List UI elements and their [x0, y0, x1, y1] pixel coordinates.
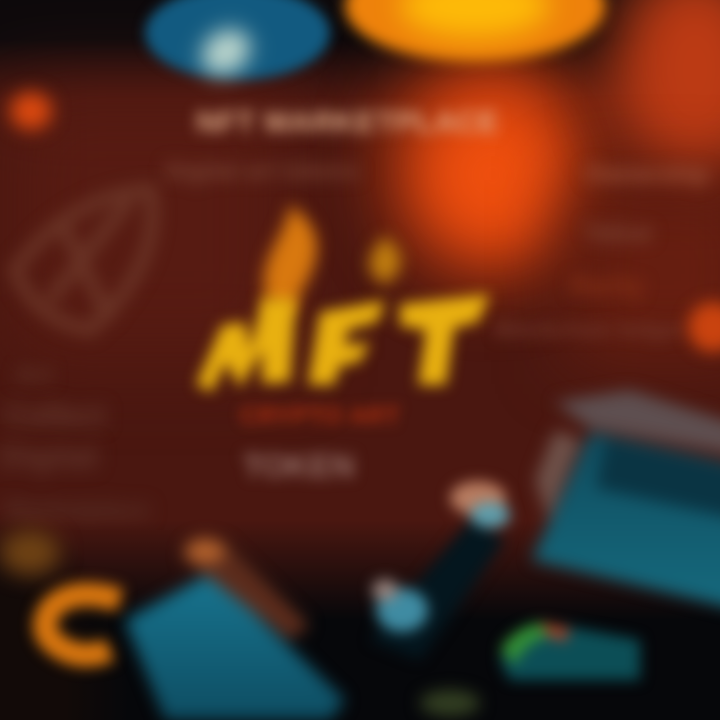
subheading: Digital art tokens: [165, 158, 360, 185]
flame icons: [252, 199, 410, 318]
left labels: Art: [15, 359, 53, 389]
small orange mark: [0, 530, 60, 575]
rainbow chart at bottom: [492, 614, 648, 688]
right teal card: [526, 383, 720, 616]
NFT title: [188, 286, 496, 400]
orange dot right: [688, 302, 720, 352]
left labels: Marketplace: [5, 496, 150, 524]
left teal card: [118, 528, 351, 720]
right label two: Value: [585, 217, 653, 247]
right label one: Ownership: [585, 161, 709, 188]
red caption: CRYPTO ART: [240, 402, 400, 430]
left wireframe icon: [7, 182, 162, 338]
pen tool: [364, 472, 519, 658]
sun orb at top: [345, 0, 605, 62]
right label three: Rarity: [570, 270, 644, 300]
orange C icon: [22, 572, 132, 678]
left labels: Collect: [5, 399, 105, 432]
left labels: Digital: [0, 438, 98, 474]
pale caption: TOKEN: [243, 448, 354, 484]
orange dot icon: [10, 92, 52, 130]
left labels: [0, 359, 150, 524]
blue globe at top: [145, 0, 330, 80]
heading: NFT MARKETPLACE: [196, 106, 499, 139]
bottom green mark: [420, 690, 480, 716]
